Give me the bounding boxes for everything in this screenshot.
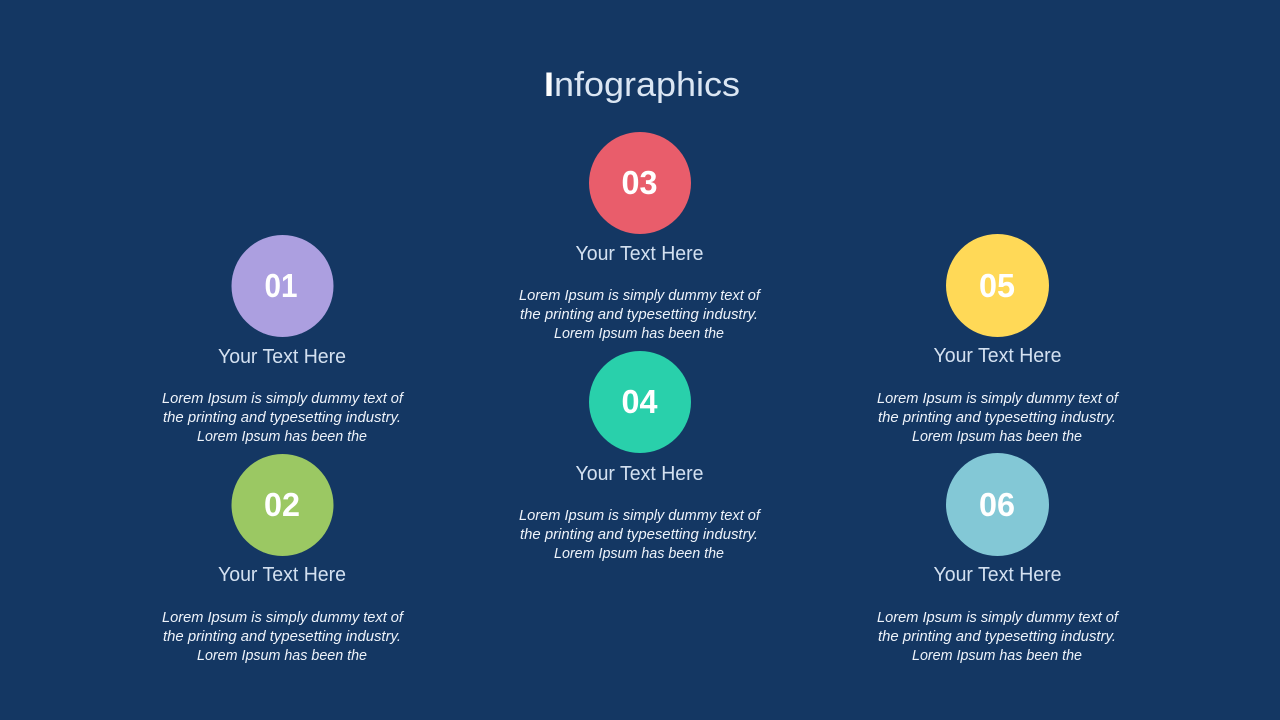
item 06 xyxy=(877,453,1120,664)
heading 04: Your Text Here xyxy=(576,463,704,485)
text block 05: Lorem Ipsum has been the xyxy=(912,429,1082,445)
text block 06: the printing and typesetting industry. xyxy=(878,629,1116,645)
text block 05: the printing and typesetting industry. xyxy=(878,410,1116,426)
item 05 xyxy=(877,234,1120,445)
text block 01: Lorem Ipsum has been the xyxy=(197,429,367,445)
item 04 xyxy=(519,351,762,562)
text block 06: Lorem Ipsum has been the xyxy=(912,648,1082,664)
text block 04: Lorem Ipsum has been the xyxy=(554,546,724,562)
number 03: 03 xyxy=(622,164,658,201)
text block 05 xyxy=(877,391,1120,445)
heading 03: Your Text Here xyxy=(576,243,704,265)
text block 02: the printing and typesetting industry. xyxy=(163,629,401,645)
number 05: 05 xyxy=(979,267,1015,304)
text block 01 xyxy=(162,391,405,445)
text block 04 xyxy=(519,508,762,562)
text block 01: the printing and typesetting industry. xyxy=(163,410,401,426)
text block 04: the printing and typesetting industry. xyxy=(520,527,758,543)
heading 05: Your Text Here xyxy=(934,345,1062,367)
heading 01: Your Text Here xyxy=(218,346,346,368)
number 01: 01 xyxy=(264,267,298,304)
icon: circle 01 xyxy=(232,235,334,337)
number 04: 04 xyxy=(622,383,658,420)
icon: circle 04 xyxy=(589,351,691,453)
text block 01: Lorem Ipsum is simply dummy text of xyxy=(162,391,405,407)
text block 03: Lorem Ipsum has been the xyxy=(554,326,724,342)
icon: circle 05 xyxy=(946,234,1049,337)
text block 02 xyxy=(162,610,405,664)
heading 06: Your Text Here xyxy=(934,564,1062,586)
text block 03: Lorem Ipsum is simply dummy text of xyxy=(519,288,762,304)
text block 03: the printing and typesetting industry. xyxy=(520,307,758,323)
number 06: 06 xyxy=(979,486,1015,523)
text block 05: Lorem Ipsum is simply dummy text of xyxy=(877,391,1120,407)
text block 04: Lorem Ipsum is simply dummy text of xyxy=(519,508,762,524)
text block 02: Lorem Ipsum is simply dummy text of xyxy=(162,610,405,626)
text block 06: Lorem Ipsum is simply dummy text of xyxy=(877,610,1120,626)
title: Infographics xyxy=(544,66,740,104)
number 02: 02 xyxy=(264,486,300,523)
heading 02: Your Text Here xyxy=(218,564,346,586)
item 01 xyxy=(162,235,405,445)
icon: circle 02 xyxy=(232,454,334,556)
text block 06 xyxy=(877,610,1120,664)
text block 02: Lorem Ipsum has been the xyxy=(197,648,367,664)
text block 03 xyxy=(519,288,762,342)
icon: circle 06 xyxy=(946,453,1049,556)
item 02 xyxy=(162,454,405,664)
icon: circle 03 xyxy=(589,132,691,234)
item 03 xyxy=(519,132,762,342)
